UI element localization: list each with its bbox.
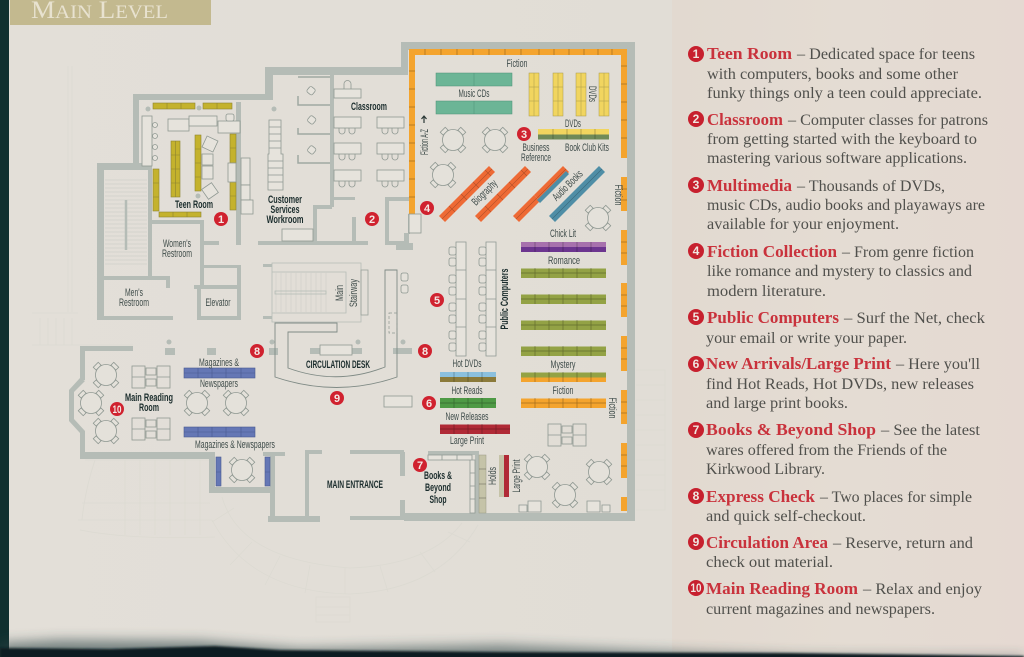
label: Main Reading Room: Main Reading <box>125 392 173 404</box>
labels: restrooms and elevator: Men's <box>125 287 143 299</box>
main stairway: Stairway <box>348 279 360 307</box>
multimedia labels <box>419 58 624 206</box>
legend item 9: Circulation Area <box>706 533 828 552</box>
marker 3: 3 <box>521 129 527 141</box>
circulation desk <box>275 270 412 407</box>
legend item 10 <box>688 579 982 618</box>
diagonal shelves: biography and audio books: Biography <box>470 177 500 208</box>
fiction stack labels: Fiction <box>606 398 618 418</box>
new arrival labels: Hot Reads <box>452 385 483 397</box>
DVD shelves <box>529 73 609 116</box>
legend item 7: 7 <box>693 423 700 437</box>
romance shelves <box>521 268 606 378</box>
reading room seating <box>132 366 170 440</box>
floor plan <box>32 42 665 622</box>
panel: fiction stacks <box>521 228 618 418</box>
marker 3 <box>517 127 531 141</box>
legend item 6: – Here you'll <box>895 356 981 373</box>
multimedia labels: DVDs <box>565 118 581 130</box>
new arrival labels: New Releases <box>446 411 489 423</box>
marker 9 <box>330 391 344 405</box>
main stairway: Main <box>334 285 346 301</box>
side stairs <box>105 180 147 264</box>
legend <box>688 44 988 618</box>
shop labels: Shop <box>430 494 447 506</box>
main stairway <box>272 263 368 322</box>
legend item 6: and large print books. <box>706 395 848 412</box>
multimedia labels: Book Club Kits <box>565 142 609 154</box>
legend item 8: Express Check <box>706 487 816 506</box>
classroom desks <box>334 80 404 187</box>
magazine shelves <box>184 368 270 486</box>
label: Classroom: Classroom <box>351 101 387 113</box>
legend item 5: 5 <box>693 310 700 324</box>
legend item 4: modern literature. <box>707 283 826 300</box>
legend item 6 <box>688 354 981 412</box>
legend item 3: 3 <box>693 178 700 192</box>
legend item 8: and quick self-checkout. <box>706 508 866 525</box>
DVDs and book club shelf <box>538 129 609 140</box>
legend item 9 <box>688 533 973 571</box>
legend item 1: – Dedicated space for teens <box>796 46 975 63</box>
legend item 10: 10 <box>690 581 702 595</box>
building walls <box>69 42 635 522</box>
marker 10 <box>110 402 124 416</box>
multimedia labels: Music CDs <box>458 88 490 100</box>
perimeter fiction shelves <box>409 49 627 511</box>
arrow: Fiction A-Z <box>422 116 426 123</box>
legend item 3 <box>688 176 985 233</box>
dark bottom edge shadow <box>0 640 1024 657</box>
legend item 6: 6 <box>693 357 700 371</box>
reading room tables <box>78 362 255 483</box>
marker 8 left <box>250 344 264 358</box>
marker 5 <box>430 293 444 307</box>
legend item 2: mastering various software applications. <box>707 150 967 167</box>
legend item 7: Books & Beyond Shop <box>706 420 876 439</box>
legend item 1: Teen Room <box>707 44 792 63</box>
panel: new arrivals and large print <box>440 358 510 447</box>
cubicle chairs and dividers <box>306 86 317 155</box>
lounge tables <box>430 127 611 231</box>
panel: customer services workroom <box>266 77 330 241</box>
panel: main reading room <box>78 357 275 486</box>
shop labels <box>424 460 523 506</box>
legend item 10: Main Reading Room <box>706 579 858 598</box>
circulation desk: CIRCULATION DESK <box>306 359 370 371</box>
marker 2 <box>365 212 379 226</box>
label: Main Entrance: MAIN ENTRANCE <box>327 479 383 491</box>
panel: books and beyond shop area <box>424 424 612 513</box>
legend item 2: from getting started with the keyboard to <box>707 131 977 148</box>
legend item 5: – Surf the Net, check <box>843 310 985 327</box>
fiction stack labels <box>548 228 618 418</box>
multimedia labels: Business <box>522 142 550 154</box>
fiction stack labels: Romance <box>548 255 580 267</box>
marker 5: 5 <box>434 295 440 307</box>
panel: classroom <box>334 80 404 187</box>
labels: magazines and newspapers: Newspapers <box>200 378 238 390</box>
legend item 4: Fiction Collection <box>707 242 837 261</box>
fiction stack labels: Mystery <box>550 359 576 371</box>
new arrival labels: Hot DVDs <box>452 358 482 370</box>
legend item 3: – Thousands of DVDs, <box>796 178 945 195</box>
label: Customer Services Workroom: Services <box>270 204 300 216</box>
legend item 1: 1 <box>693 47 700 61</box>
labels: magazines and newspapers: Magazines & Newspapers <box>195 439 275 451</box>
shop labels: Large Print <box>511 460 523 492</box>
legend item 8: 8 <box>693 489 700 503</box>
fiction stack labels: Fiction <box>552 385 574 397</box>
marker 7: 7 <box>417 460 423 472</box>
legend item 7: – See the latest <box>880 422 981 439</box>
legend item 5: Public Computers <box>707 308 840 327</box>
panel: legend background <box>672 0 1024 657</box>
hot reads shelf <box>440 398 496 408</box>
new arrival labels <box>446 358 489 447</box>
marker 8 left: 8 <box>254 346 260 358</box>
legend item 10: current magazines and newspapers. <box>706 601 935 618</box>
legend item 5: your email or write your paper. <box>706 330 907 347</box>
legend item 3: music CDs, audio books and playaways are <box>707 197 985 214</box>
fiction stack labels: Chick Lit <box>550 228 576 240</box>
computer chairs <box>449 247 486 351</box>
shop labels: Holds <box>487 467 499 485</box>
legend item 1 <box>688 44 982 102</box>
legend item 3: Multimedia <box>707 176 792 195</box>
dark left edge strip <box>0 0 9 657</box>
multimedia labels: Fiction <box>612 184 624 206</box>
labels: magazines and newspapers <box>195 357 275 451</box>
music CD shelves <box>436 73 512 114</box>
marker 1 <box>214 212 228 226</box>
holds shelf <box>479 455 486 513</box>
labels: restrooms and elevator <box>119 238 231 309</box>
shop labels: Books & <box>424 470 452 482</box>
labels: restrooms and elevator: Elevator <box>206 297 231 309</box>
legend item 9: 9 <box>693 535 700 549</box>
legend item 6: find Hot Reads, Hot DVDs, new releases <box>706 376 974 393</box>
legend item 9: – Reserve, return and <box>832 535 973 552</box>
multimedia labels: Reference <box>521 152 551 164</box>
legend item 1: funky things only a teen could appreciate. <box>707 85 982 102</box>
marker 6 <box>422 396 436 410</box>
legend item 5 <box>688 308 985 347</box>
marker 10: 10 <box>112 404 122 416</box>
new arrival labels: Large Print <box>450 435 484 447</box>
label: Main Reading Room: Room <box>139 402 159 414</box>
lower lounge seating and tables <box>519 424 612 512</box>
counter <box>282 229 313 241</box>
cubicles <box>298 77 330 163</box>
marker 6: 6 <box>426 398 432 410</box>
legend item 4 <box>688 242 974 300</box>
legend item 7: wares offered from the Friends of the <box>706 442 947 459</box>
panel: public computers <box>449 242 511 356</box>
diagonal shelves: biography and audio books <box>442 168 602 219</box>
legend item 8 <box>688 487 972 525</box>
labels: restrooms and elevator: Restroom <box>119 297 149 309</box>
diagonal shelves: biography and audio books: Audio Books <box>550 168 586 204</box>
chick lit shelf <box>521 242 606 252</box>
marker 8 right: 8 <box>422 346 428 358</box>
large print shelf <box>440 424 510 434</box>
label: Teen Room: Teen Room <box>175 199 213 211</box>
shelving unit <box>268 120 283 190</box>
legend item 1: with computers, books and some other <box>707 66 959 83</box>
legend item 9: check out material. <box>706 554 833 571</box>
map markers <box>110 127 531 472</box>
teen room furniture <box>142 114 253 214</box>
labels: restrooms and elevator: Restroom <box>162 248 192 260</box>
legend item 6: New Arrivals/Large Print <box>706 354 892 373</box>
heading band: Main Level <box>10 0 211 25</box>
hot DVDs shelf <box>440 372 496 382</box>
large print end shelf <box>499 455 509 497</box>
computer desks <box>456 242 496 356</box>
multimedia labels: Fiction <box>506 58 528 70</box>
legend item 10: – Relax and enjoy <box>862 581 982 598</box>
ghost exterior outlines <box>32 66 665 622</box>
marker 4 <box>420 201 434 215</box>
legend item 2: – Computer classes for patrons <box>787 112 988 129</box>
marker 4: 4 <box>424 203 431 215</box>
marker 2: 2 <box>369 214 375 226</box>
marker 9: 9 <box>334 393 340 405</box>
panel: teen room <box>142 103 253 217</box>
legend item 2: Classroom <box>707 110 783 129</box>
legend item 3: available for your enjoyment. <box>707 216 899 233</box>
shop labels: Beyond <box>425 482 451 494</box>
legend item 4: like romance and mystery to classics and <box>707 263 972 280</box>
legend item 2 <box>688 110 988 167</box>
marker 8 right <box>418 344 432 358</box>
teen room shelves <box>153 103 236 217</box>
legend item 4: 4 <box>693 244 700 258</box>
marker 1: 1 <box>218 214 224 226</box>
label: Customer Services Workroom: Customer <box>268 194 302 206</box>
panel: multimedia <box>419 58 624 231</box>
label: Customer Services Workroom: Workroom <box>266 214 304 226</box>
labels: magazines and newspapers: Magazines & <box>199 357 239 369</box>
labels: restrooms and elevator: Women's <box>163 238 191 250</box>
legend item 8: – Two places for simple <box>819 489 972 506</box>
mystery and fiction shelves <box>521 378 606 408</box>
legend item 7: Kirkwood Library. <box>706 461 825 478</box>
label: Public Computers: Public Computers <box>499 268 511 330</box>
legend item 7 <box>688 420 981 478</box>
marker 7 <box>413 458 427 472</box>
legend item 2: 2 <box>693 112 700 126</box>
shop shelves <box>428 455 475 513</box>
multimedia labels: Fiction A-Z <box>419 129 431 155</box>
multimedia labels: DVDs <box>586 86 598 102</box>
legend item 4: – From genre fiction <box>841 244 974 261</box>
